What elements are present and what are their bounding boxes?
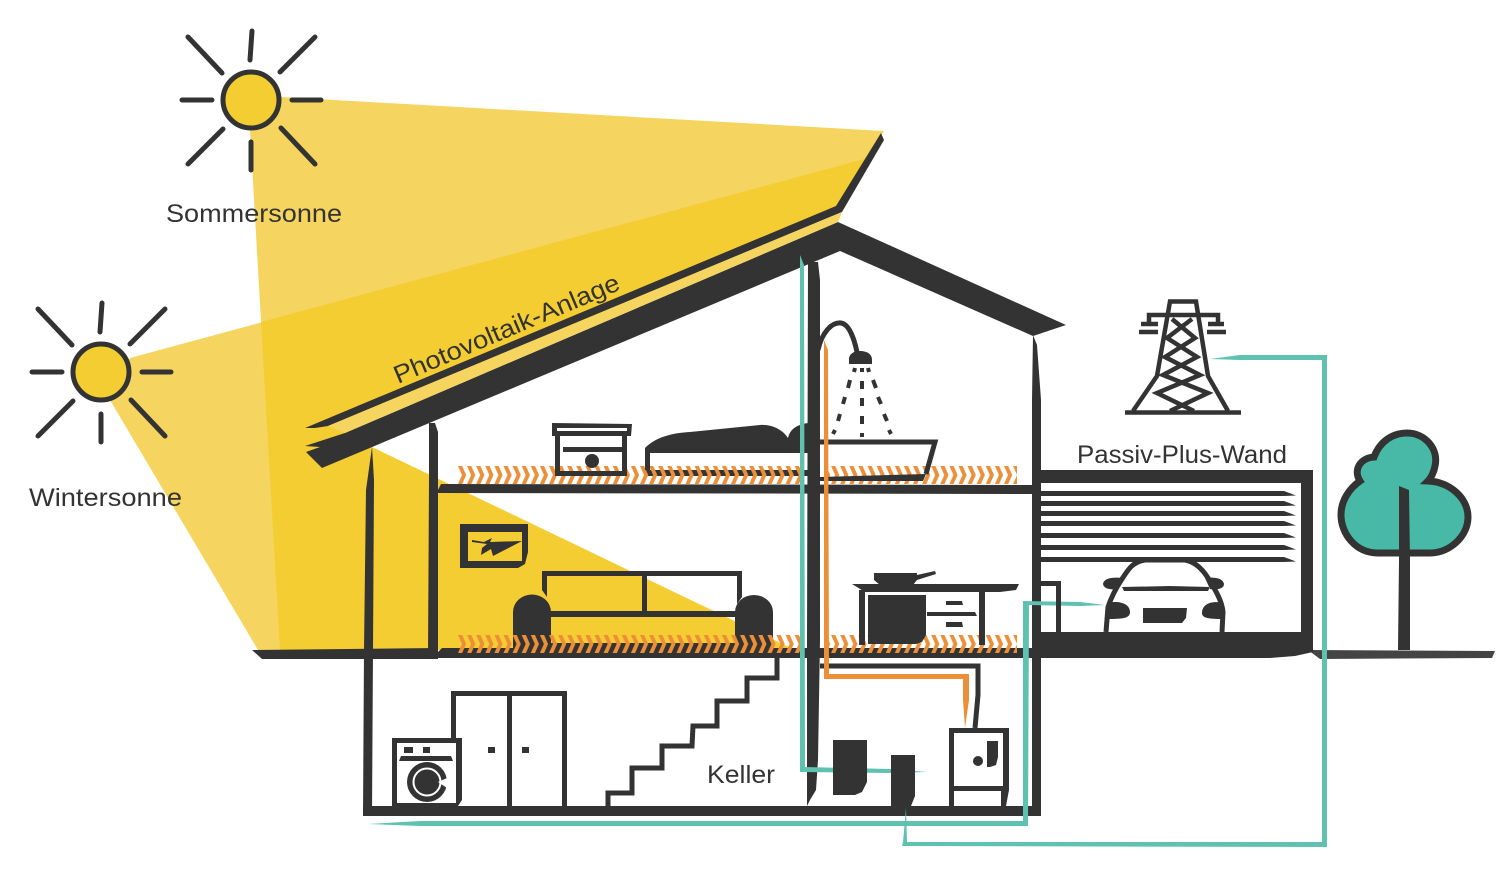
central wall — [807, 262, 820, 806]
car — [1103, 560, 1224, 632]
furniture: wardrobe — [454, 694, 564, 806]
tree crown — [1341, 433, 1468, 553]
furniture: nightstand — [552, 423, 632, 476]
tub — [820, 442, 935, 474]
beam: summer sun — [250, 97, 884, 650]
icon: summer sun — [182, 31, 321, 170]
right wall — [1032, 335, 1041, 816]
furniture: washing machine — [392, 738, 462, 806]
furniture: bed — [645, 423, 808, 470]
oven — [868, 595, 926, 644]
ground floor — [438, 648, 1041, 658]
teal cable: solar collection line — [800, 255, 927, 773]
garage shell — [1041, 470, 1313, 658]
dark pipe — [820, 666, 978, 728]
upper floor heating chevrons — [458, 466, 1017, 484]
stairs — [608, 658, 777, 806]
beam: winter sun — [110, 158, 868, 650]
garage — [1040, 470, 1313, 658]
upper floor — [438, 484, 1033, 494]
tank two — [891, 755, 915, 806]
ground right — [1308, 650, 1495, 659]
insulation layers — [1041, 491, 1296, 562]
pot — [874, 571, 936, 585]
label: Photovoltaik-Anlage: Photovoltaik-Anlage — [389, 269, 624, 390]
shower arm — [818, 323, 857, 352]
basement floor — [363, 806, 1041, 816]
lower floor heating chevrons — [458, 635, 1017, 653]
inner wall — [428, 423, 438, 658]
teal cable: garage and floor line — [368, 601, 1105, 826]
icon: tree — [1341, 433, 1468, 650]
teal cable: grid connection — [902, 355, 1327, 847]
tank one — [833, 740, 867, 795]
beam: overlap of summer and winter sun — [261, 158, 868, 650]
cabinet legs — [859, 590, 865, 645]
furniture: sofa — [513, 571, 773, 649]
icon: winter sun — [32, 303, 171, 442]
outer left wall — [363, 447, 374, 816]
beam: sunlight entering the living room — [372, 447, 795, 650]
label: Passiv-Plus-Wand: Passiv-Plus-Wand — [1077, 441, 1287, 469]
sunlight beams — [110, 97, 884, 650]
ground left — [252, 648, 438, 659]
label: Sommersonne: Sommersonne — [166, 200, 342, 228]
roof — [305, 222, 1066, 468]
tree trunk — [1398, 486, 1410, 650]
photovoltaic panel strip and roof edge — [305, 133, 884, 428]
basement storage tanks — [833, 740, 915, 806]
orange hot water pipe — [824, 340, 969, 728]
picture frame — [460, 524, 528, 568]
small box — [1040, 581, 1061, 632]
drawers — [927, 601, 977, 627]
water drops — [833, 368, 891, 437]
icon: power pylon — [1125, 302, 1241, 412]
furniture: kitchen — [852, 571, 1019, 645]
house structure — [252, 133, 1066, 816]
house walls — [363, 262, 1495, 816]
tub bottom — [820, 474, 926, 481]
label: Wintersonne: Wintersonne — [29, 484, 182, 512]
heat pump boiler — [949, 728, 1009, 806]
countertop — [852, 584, 1019, 592]
pale yellow line on the roof — [328, 212, 842, 433]
furniture: shower and tub — [818, 323, 935, 481]
label: Keller: Keller — [707, 761, 775, 789]
shower head — [849, 351, 872, 364]
